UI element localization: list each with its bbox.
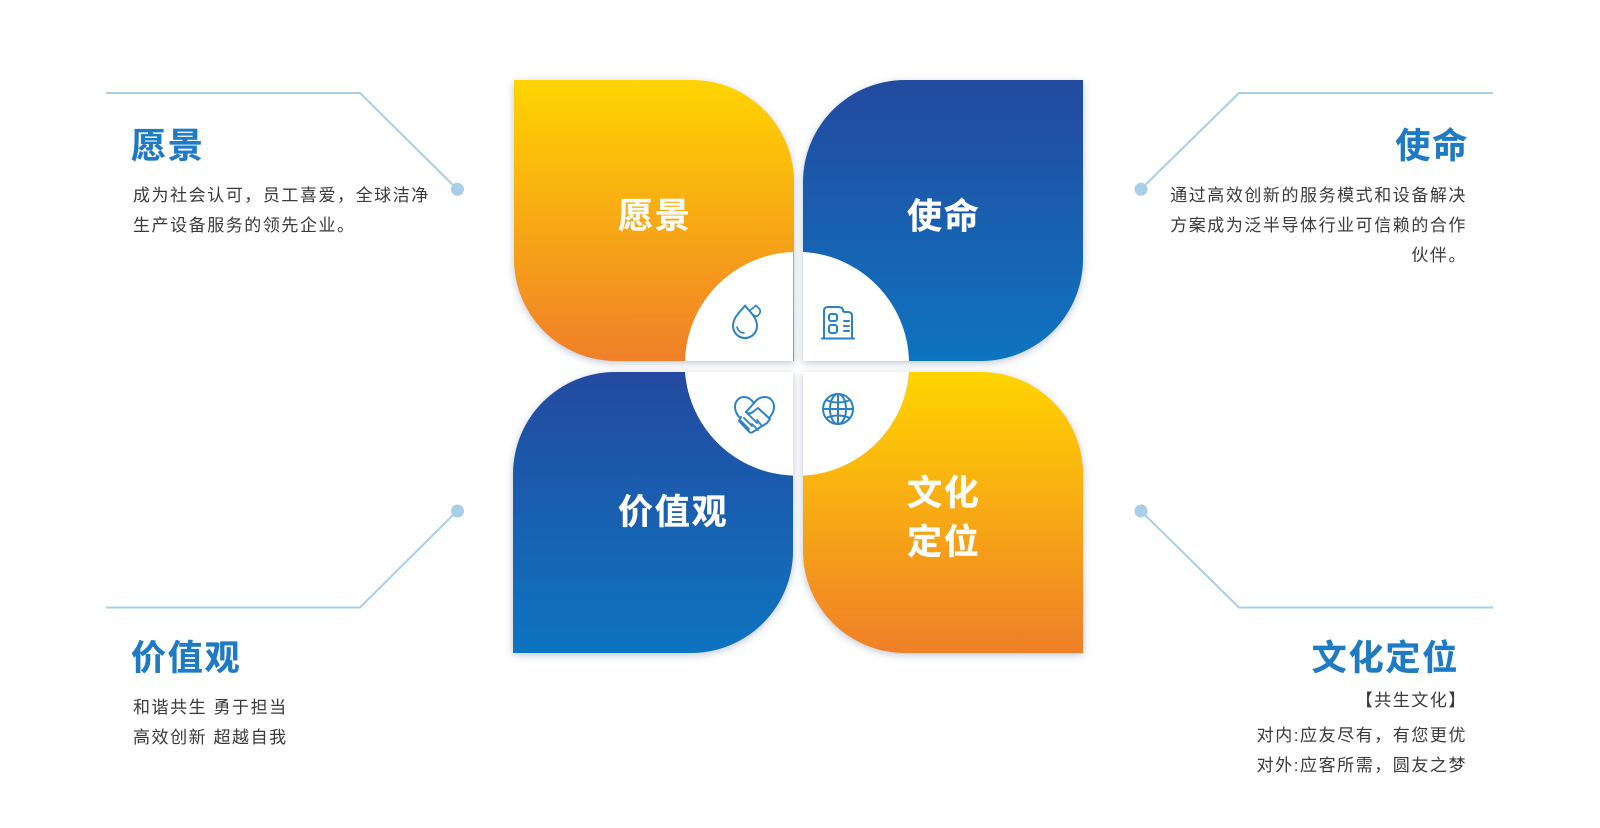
- text block: vision: 成为社会认可，员工喜爱，全球洁净: [133, 186, 430, 205]
- heading: mission: 使命: [1395, 127, 1469, 166]
- petal label: culture: 定位: [907, 523, 981, 562]
- icon: globe: [823, 394, 853, 424]
- panel: vision petal: [514, 80, 794, 361]
- heading: culture: 文化定位: [1312, 639, 1459, 678]
- petal label: culture: 文化: [907, 474, 981, 513]
- heading: values: 价值观: [131, 639, 241, 678]
- text block: culture: 【共生文化】: [1356, 691, 1467, 710]
- icon: building: [822, 307, 854, 338]
- text block: values: 高效创新 超越自我: [133, 728, 288, 747]
- text block: culture: 对内:应友尽有，有您更优: [1257, 726, 1467, 745]
- text block: values: 和谐共生 勇于担当: [133, 698, 288, 717]
- text block: vision: [133, 186, 430, 235]
- connector: culture: [1134, 504, 1493, 608]
- text block: culture: [1257, 691, 1467, 775]
- text block: mission: 方案成为泛半导体行业可信赖的合作: [1170, 216, 1467, 235]
- petal label: values: 价值观: [618, 493, 728, 532]
- panel: mission petal: [803, 80, 1083, 361]
- connector: mission: [1134, 93, 1493, 196]
- petal label: vision: 愿景: [618, 197, 692, 236]
- heading: vision: 愿景: [131, 127, 205, 166]
- panel: values petal: [513, 372, 793, 653]
- connector: vision: [106, 93, 464, 196]
- text block: vision: 生产设备服务的领先企业。: [133, 216, 356, 235]
- text block: mission: 伙伴。: [1411, 246, 1467, 265]
- text block: mission: [1170, 186, 1467, 265]
- connector: values: [106, 504, 464, 608]
- petal label: culture: [907, 474, 981, 562]
- text block: values: [133, 698, 288, 747]
- petal label: mission: 使命: [907, 198, 981, 236]
- text block: mission: 通过高效创新的服务模式和设备解决: [1170, 186, 1467, 205]
- text block: culture: 对外:应客所需，圆友之梦: [1257, 756, 1467, 775]
- icon: heart handshake: [735, 397, 774, 433]
- icon: water drop: [733, 306, 760, 338]
- panel: culture petal: [803, 372, 1083, 653]
